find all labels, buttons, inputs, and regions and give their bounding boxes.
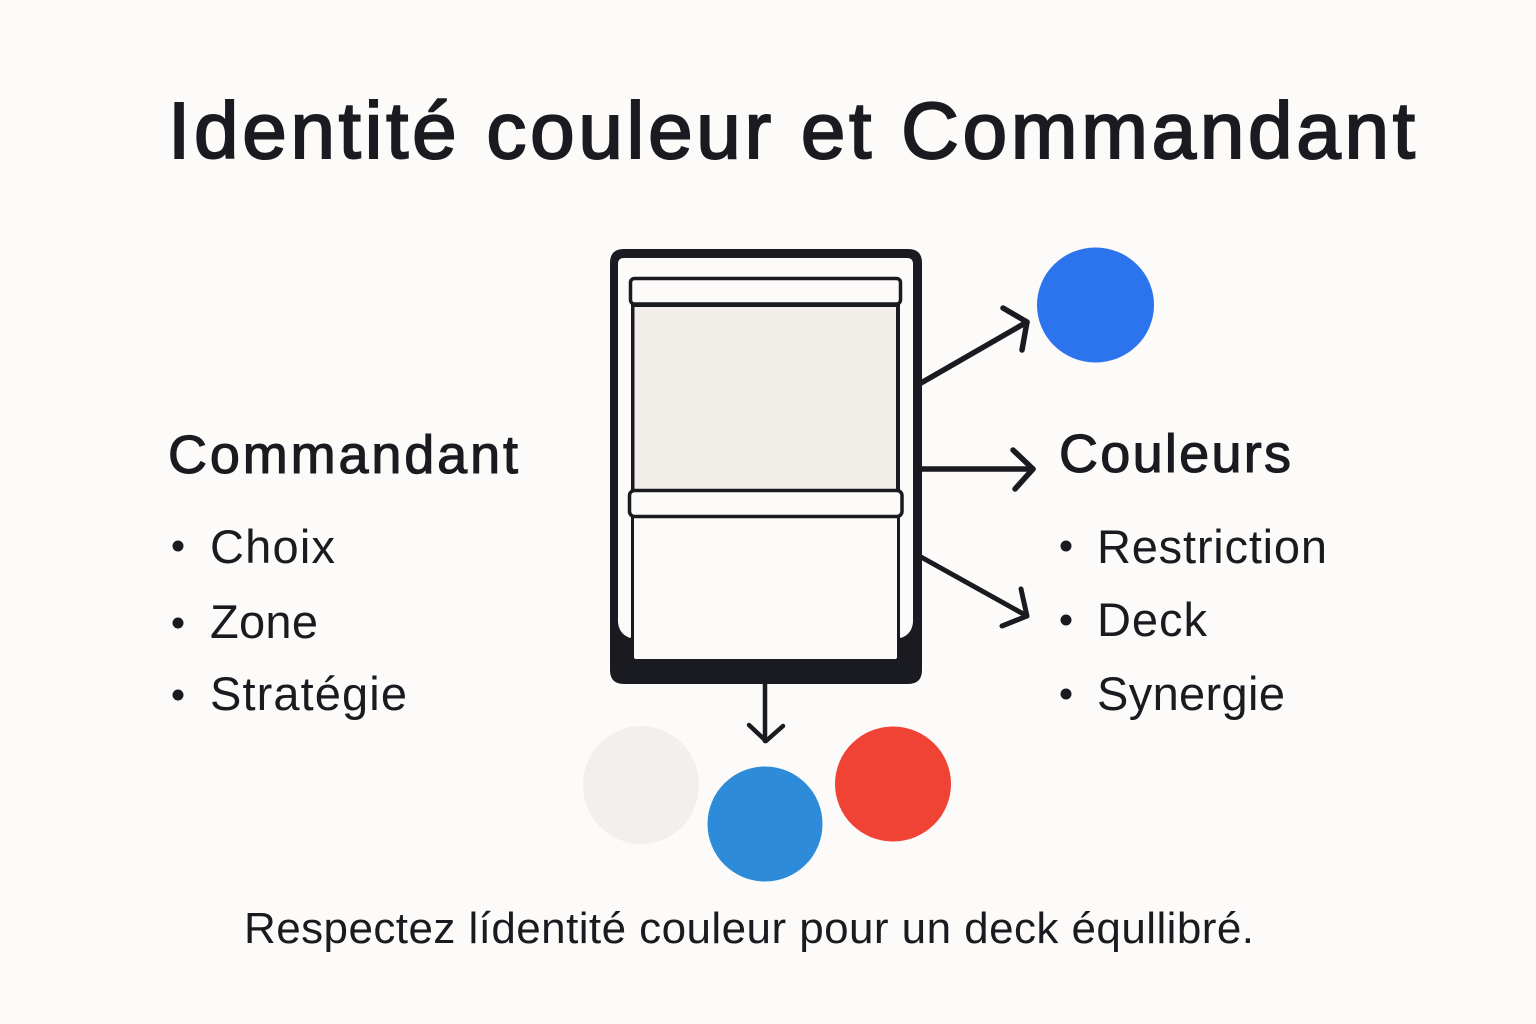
card frame bbox=[610, 249, 922, 684]
title bar bbox=[630, 278, 900, 304]
footer message: Respectez lídentité couleur pour un deck équllibré. bbox=[244, 904, 1254, 953]
list item: synergie: Synergie bbox=[1097, 667, 1285, 720]
circle: blue bbox=[1037, 248, 1154, 362]
title: Identité couleur et Commandant bbox=[168, 86, 1415, 175]
circle: light grey bbox=[583, 726, 699, 844]
type bar bbox=[630, 490, 902, 516]
arrow: down to colours bbox=[749, 684, 783, 741]
heading: commandant: Commandant bbox=[168, 425, 518, 485]
circle: red bbox=[835, 726, 951, 842]
arrow: to blue circle bbox=[921, 308, 1027, 383]
list item: deck: Deck bbox=[1097, 593, 1208, 646]
list item: restriction: Restriction bbox=[1097, 520, 1327, 573]
heading: couleurs: Couleurs bbox=[1059, 424, 1291, 484]
arrow: to deck bbox=[921, 557, 1027, 626]
card diagram bbox=[610, 249, 922, 684]
list item: stratégie: Stratégie bbox=[210, 667, 407, 720]
arrow: to couleurs bbox=[921, 450, 1033, 489]
list item: choix: Choix bbox=[210, 520, 335, 573]
panel backing bbox=[631, 300, 900, 662]
art area bbox=[634, 307, 896, 489]
list item: zone: Zone bbox=[210, 595, 318, 648]
panel: commandant bbox=[168, 425, 518, 720]
text area bbox=[634, 516, 897, 659]
circle: medium blue bbox=[708, 766, 822, 882]
panel: couleurs bbox=[1059, 424, 1327, 720]
